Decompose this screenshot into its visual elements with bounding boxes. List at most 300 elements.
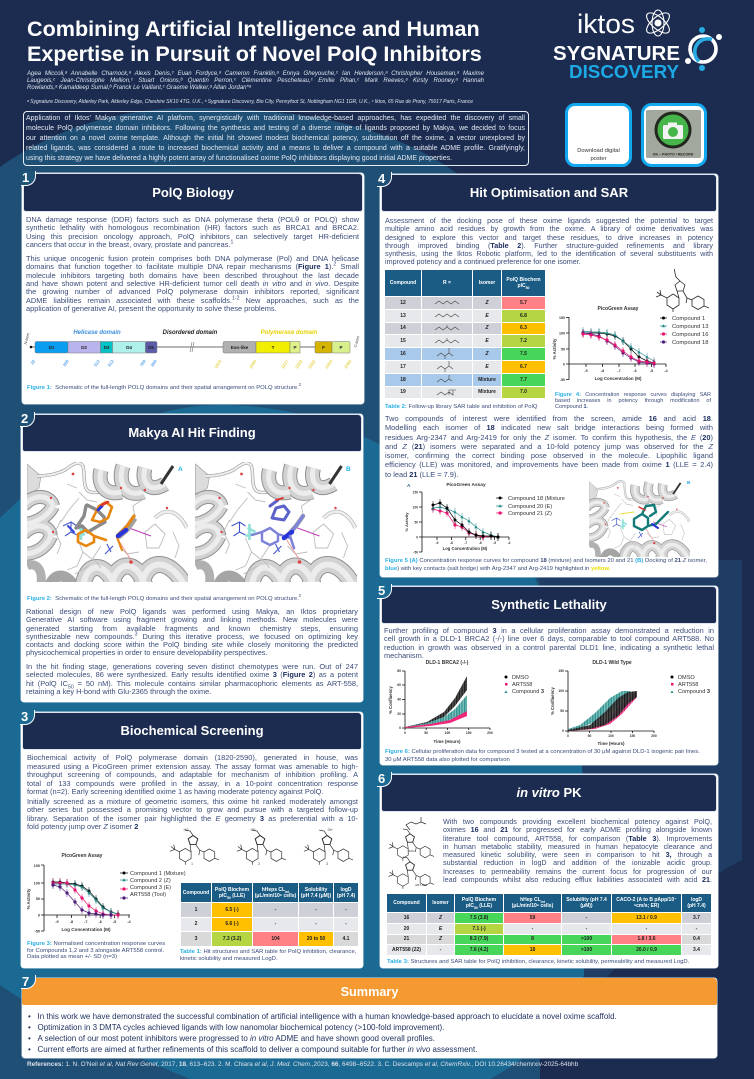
chart: figure 5A PicoGreen assay: 150 [413, 490, 418, 494]
text block: biochemical activity: Biochemical activity of PolQ polymerase domain (1820-2590), generated in house, was [27, 753, 358, 762]
chart: DLD-1 BRCA2 proliferation: 150 [466, 731, 472, 735]
logo: iktos: iktos [577, 9, 635, 39]
legend: ART558 [678, 682, 698, 688]
chemical structures 21 and ART-558: 16/21 [407, 849, 415, 853]
chart: DLD-1 BRCA2 proliferation: DLD-1 BRCA2 (-/-) [426, 660, 469, 666]
text block: compounds of interest: residues Arg-2347 and Arg-2419 for only the Z isomer. To confirm this hypothesis, the E (20) [385, 433, 713, 442]
table 2: follow-up library SAR: Z [485, 351, 489, 357]
bullet list: conclusions: • A selection of our most potent inhibitors were progressed to in vitro ADME and have shown good overall profiles. [28, 1034, 435, 1042]
table 3: PK SAR: 3.4 [693, 947, 700, 953]
chart: DLD-1 BRCA2 proliferation: 60 [397, 683, 401, 687]
chart: figure 5A PicoGreen assay: PicoGreen Assay [446, 482, 486, 488]
band: compound 3 [568, 691, 630, 731]
curve: compound 13 [583, 331, 654, 361]
table 1: hit structures and SAR: 1 [195, 907, 197, 913]
legend: Compound 13 [672, 324, 708, 330]
text block: compounds of interest: Two compounds of interest were identified from the screen, amide 16 and acid 18. [385, 414, 713, 423]
chemical structures 1, 2, 3: OH [328, 828, 333, 832]
figure 1: POLQ domain schematic: Polymerase domain [261, 330, 318, 336]
caption: figure 3: for Compounds 1,2 and 3 alongside ART558 control. [27, 948, 164, 954]
table 2: follow-up library SAR: pIC50 [518, 283, 529, 290]
text block: Makya rational design: synthesizable new compounds.3 During this iterative process, we focused on optimizing key [26, 631, 358, 641]
chart: figure 4 PicoGreen assay with structure: -5 [650, 369, 653, 373]
table 1: hit structures and SAR: (pH 7.4 (μM)) [301, 892, 331, 898]
chart: figure 4 PicoGreen assay with structure: -50 [560, 378, 565, 382]
table 3: PK SAR [387, 894, 711, 955]
caption: figure 4: based increases in potency through modification of [555, 398, 711, 404]
section number 5: 5 [378, 583, 385, 598]
table 1: hit structures and SAR: 6.5 (-) [225, 907, 239, 913]
chart: figure 5A PicoGreen assay: -8 [450, 541, 453, 545]
chart: figure 4 PicoGreen assay with structure: -7 [617, 369, 621, 373]
chart: figure 5A PicoGreen assay: % Activity [404, 512, 409, 531]
section number 2: 2 [21, 411, 28, 426]
figure 1: POLQ domain schematic: Disordered domain [163, 330, 218, 336]
authors: Agea Miccoli,ᵃ Annabelle Charnock,ᵃ Alexis Denis,ᶜ Euan Fordyce,ᵃ Cameron Franklin,ᵃ Ennya Gheyouche,ᶜ Ian Henderson,ᵃ Christopher Houseman,ᵃ Maxime [27, 71, 484, 77]
text block: hit finding results: retaining a key H-bond with Glu-2365 through the oxime. [26, 687, 211, 696]
curve: compound 21 [433, 509, 498, 537]
chart: figure 3 PicoGreen assay: 100 [34, 882, 40, 886]
chart: figure 5A PicoGreen assay: -4 [508, 541, 511, 545]
section heading: Makya AI Hit Finding: Makya AI Hit Finding [128, 425, 256, 440]
table 2: follow-up library SAR: E [485, 338, 489, 344]
chart: DLD-1 Wild Type proliferation: Time (Hours) [598, 741, 625, 746]
figure 1: POLQ domain schematic: 2090 [248, 358, 258, 369]
table 2: follow-up library SAR: 19 [400, 389, 406, 395]
figure 1: POLQ domain schematic: 2590 [343, 358, 353, 369]
section heading: Synthetic Lethality: Synthetic Lethality [491, 597, 607, 612]
table 3: PK SAR: ART558 (22) [392, 947, 421, 953]
table 3: PK SAR: 3.7 [693, 915, 700, 921]
QR code box: photo record: OK – PHOTO / RECORD [653, 152, 694, 156]
table 1: hit structures and SAR: Compound [183, 890, 209, 896]
table 2: follow-up library SAR: 7.7 [520, 377, 527, 383]
panel: in vitro PK [380, 774, 718, 968]
chart: figure 3 PicoGreen assay: -9 [55, 920, 59, 924]
legend: Compound 18 (Mixture [508, 496, 565, 502]
abstract box [23, 111, 529, 166]
table 1: hit structures and SAR: pIC50 (LLE) [219, 892, 245, 900]
chemical structures 21 and ART-558 [388, 817, 434, 889]
text block: hit finding results: selected molecules, 86 were synthesized. Early results identified oxime 3 (Figure 2) as a potent [26, 670, 358, 679]
caption: figure 5 [385, 558, 707, 572]
section heading: Summary: Summary [341, 985, 398, 999]
table 2: follow-up library SAR: 18 [400, 377, 406, 383]
table 2: follow-up library SAR: 16 [400, 351, 406, 357]
text block: ADME profiling: substantial reduction in logD and addition of the ionizable acidic group. [443, 858, 712, 867]
text block: docking pose assessment [385, 216, 713, 266]
R-group sketches for table 2 [434, 300, 460, 396]
chart: figure 5A PicoGreen assay: -7 [464, 541, 467, 545]
section number 4: 4 [378, 171, 385, 186]
title: Expertise in Pursuit of Novel PolQ Inhibitors [27, 41, 482, 66]
logo: Sygnature Discovery: DISCOVERY [569, 62, 679, 82]
table 3: PK SAR: 7.6 (4.2) [470, 947, 488, 953]
chart: DLD-1 BRCA2 proliferation: Time (Hours) [434, 739, 461, 744]
table 1: hit structures and SAR: (pH 7.4) [337, 892, 355, 898]
table 3: PK SAR: pIC50 (LLE) [466, 903, 492, 910]
text block: compounds of interest: to lead 21 (LLE = 7.9). [385, 470, 458, 479]
table 3: PK SAR: Z [439, 936, 442, 942]
text block: PolQ fusion protein: molecule inhibitors targeting both domains have been described throughout the last decade [26, 271, 359, 280]
legend: Compound 21 (Z) [508, 511, 552, 517]
text block: Makya rational design: Rational design of new PolQ ligands was performed using Makya, an Iktos proprietary [26, 607, 358, 616]
chart: figure 4 PicoGreen assay with structure [552, 269, 710, 382]
download digital poster box: Download digital [577, 148, 620, 154]
figure 1: POLQ domain schematic: D3 [104, 345, 110, 350]
chart: DLD-1 Wild Type proliferation: 50 [560, 709, 564, 713]
legend: Compound 16 [672, 332, 708, 338]
table 2: follow-up library SAR: 15 [400, 338, 406, 344]
panel: Makya AI Hit Finding [21, 414, 363, 702]
chart: DLD-1 Wild Type proliferation: 150 [558, 669, 564, 673]
figure 1: POLQ domain schematic: 2424 [324, 358, 334, 369]
text block: PolQ biology introduction: Using this precision oncology approach, PolQ inhibitors can selectively target HR-deficient [26, 232, 359, 241]
text block: PolQ fusion protein: This unique oncogenic fusion protein comprises both DNA polymerase (Pol) and DNA helicase [26, 254, 359, 263]
table 1: hit structures and SAR: - [345, 921, 347, 927]
text block: isomer separation: fold potency jump over Z isomer 2 [27, 822, 138, 831]
figure 1: POLQ domain schematic: 613 [107, 358, 115, 367]
section number 3: 3 [21, 709, 28, 724]
text block: compounds of interest: Modelling each isomer of 18 indicated new salt bridge interactions being formed with [385, 423, 713, 432]
chart: figure 3 PicoGreen assay: Log Concentration (M) [62, 927, 111, 932]
table 3: PK SAR: 7.1 (-) [472, 926, 486, 932]
figure 5B: docking of compound 21 [589, 480, 691, 557]
text block: Makya rational design: Generative AI software using fragment growing and linking methods. New molecules were [26, 615, 358, 624]
text block: compounds of interest: efficiency (LLE) was monitored, and improvements have been made from oxime 1 (LLE = 2.4) [385, 460, 713, 469]
chart: figure 3 PicoGreen assay: 0 [38, 914, 40, 918]
chart: figure 4 PicoGreen assay with structure: -6 [633, 369, 637, 373]
table 2: follow-up library SAR: 17 [400, 364, 406, 370]
table 3: PK SAR: Compound [393, 900, 420, 906]
caption: figure 2: Figure 2: Schematic of the full-length POLQ domains and their spatial arrangement on POLQ structure.2 [27, 593, 301, 602]
section heading: Hit Optimisation and SAR [381, 174, 717, 212]
section number 4 [377, 172, 392, 187]
caption: table 2: Table 2: Follow-up library SAR table and inhibition of PolQ [385, 404, 537, 410]
chart: DLD-1 BRCA2 proliferation: 50 [424, 731, 428, 735]
table 1: hit structures and SAR: - [315, 907, 317, 913]
table 3: PK SAR: - [586, 915, 587, 921]
figure 1: POLQ domain schematic: 2253 [294, 358, 304, 369]
table 1: hit structures and SAR: 20 to 50 [307, 936, 325, 942]
figure 1: POLQ domain schematic: 32 [29, 358, 37, 365]
panel: Summary [22, 978, 717, 1058]
caption: figure 4 [555, 392, 712, 410]
text block: ADME profiling [443, 817, 712, 884]
text block: biochemical activity [27, 753, 358, 796]
chemical structures 1, 2, 3 [170, 828, 353, 866]
text block: ADME profiling: in human metabolic stability, measured in human hepatocyte clearance and [443, 842, 712, 851]
table 2: follow-up library SAR: 14 [400, 325, 406, 331]
caption: figure 5: Figure 5 (A) Concentration response curves for compound 18 (mixture) and Isomers 20 and 21 (B) Docking of 21 Z isomer, [385, 558, 707, 564]
section heading: Makya AI Hit Finding [22, 414, 362, 452]
chart: figure 5A PicoGreen assay: -6 [479, 541, 482, 545]
chart: figure 3 PicoGreen assay: -50 [34, 930, 40, 934]
table 2: follow-up library SAR [385, 270, 545, 398]
section heading: in vitro PK: in vitro PK [516, 785, 582, 800]
text block: compounds of interest: and Z (21) isomers were separated and a 10-fold potency jump was observed for the Z [385, 442, 713, 451]
table 2: follow-up library SAR: 6.7 [520, 364, 527, 370]
legend: DMSO [512, 675, 529, 681]
table 3: PK SAR: ⁶cm/s; ER) [634, 903, 659, 909]
chemical structures 1, 2, 3: HO [251, 828, 256, 832]
chart: figure 4 PicoGreen assay with structure: -9 [584, 369, 588, 373]
figure 1: POLQ domain schematic: 513 [93, 358, 101, 367]
figure 1: POLQ domain schematic: 2332 [307, 358, 317, 369]
chart: DLD-1 BRCA2 proliferation: 80 [397, 669, 401, 673]
text block: docking pose assessment: synthesis, using the Iktos Robotic platform, led to the identification of several substituents with [385, 249, 713, 258]
legend: Compound 1 (Mixture) [130, 871, 186, 877]
table 1: hit structures and SAR: 3 [195, 936, 197, 942]
caption: table 1: Table 1: Hit structures and SAR table for PolQ inhibition, clearance, [180, 949, 356, 955]
chart: DLD-1 Wild Type proliferation: DLD-1 Wild Type [592, 660, 632, 666]
text block: biochemical activity: total of 133 compounds were profiled in the assay, in a 10-point concentration response [27, 778, 358, 788]
QR code box: photo record [641, 103, 707, 167]
table 1: hit structures and SAR: logD [340, 886, 352, 892]
chart: figure 3 PicoGreen assay: -5 [113, 920, 116, 924]
table 3: PK SAR: hHep CLint [520, 897, 545, 904]
table 2: follow-up library SAR: Z [485, 300, 489, 306]
chart: figure 4 PicoGreen assay with structure: PicoGreen Assay [598, 306, 639, 312]
chart: DLD-1 Wild Type proliferation: 200 [651, 734, 657, 738]
chart: DLD-1 BRCA2 proliferation [388, 660, 544, 744]
download digital poster box: poster [590, 156, 607, 162]
table 3: PK SAR: (μL/min/10⁶ cells) [512, 903, 553, 909]
chart: figure 4 PicoGreen assay with structure: 50 [561, 348, 565, 352]
abstract box: using this strategy we have delivered a highly potent array of functionalised oxime PolQ inhibitors displaying good initial ADME properties. [26, 154, 452, 162]
figure 5B: docking of compound 21: B [687, 480, 691, 485]
section heading: Biochemical Screening [22, 712, 362, 750]
caption: figure 3: Figure 3: Normalised concentration response curves [27, 941, 165, 947]
section heading: Biochemical Screening: Biochemical Screening [120, 723, 264, 738]
chart: DLD-1 BRCA2 proliferation: 100 [445, 731, 450, 735]
table 1: hit structures and SAR: 104 [271, 936, 280, 942]
text block: cellular profiling: mechanism. [384, 651, 424, 660]
title: Combining Artificial Intelligence and Human [27, 16, 480, 41]
panel: Synthetic Lethality [380, 586, 718, 765]
chart: figure 3 PicoGreen assay: 50 [36, 897, 40, 901]
chart: figure 4 PicoGreen assay with structure: 100 [559, 332, 565, 336]
logo: Sygnature Discovery [553, 27, 722, 82]
table 3: PK SAR: E [439, 926, 442, 932]
curve: compound 18 [583, 333, 654, 364]
chart: figure 5A PicoGreen assay: 50 [414, 520, 418, 524]
chart: figure 5A PicoGreen assay [404, 482, 565, 554]
chart: DLD-1 BRCA2 proliferation: 40 [397, 698, 401, 702]
table 2: follow-up library SAR: Compound [390, 280, 416, 286]
chemical structure [656, 267, 709, 312]
table 3: PK SAR: - [586, 926, 587, 932]
caption: figure 6: 30 μM ART558 data also plotted for comparison [385, 757, 510, 763]
chart: DLD-1 Wild Type proliferation: 100 [558, 689, 564, 693]
text block: PolQ fusion protein: and have shown potent and selective HR-deficient tumor cell death in vitro and in vivo. Despite [26, 279, 359, 288]
text block: ADME profiling: With two compounds providing excellent biochemical potency against PolQ, [443, 817, 712, 826]
legend: Compound 2 (Z) [130, 878, 171, 884]
ligand A: orange [68, 502, 135, 550]
table 3: PK SAR: 21 [404, 936, 409, 942]
band: DMSO [568, 691, 637, 731]
figure 2: docking poses A and B [27, 462, 357, 582]
text block: hit finding results: In the hit finding stage, generations covering seven distinct chemotypes were run. Out of 247 [26, 662, 358, 671]
table 2: follow-up library SAR: Mixture [478, 389, 496, 395]
chart: DLD-1 Wild Type proliferation: 0 [567, 734, 569, 738]
chart: DLD-1 BRCA2 proliferation: 200 [487, 731, 493, 735]
section number 6 [377, 772, 392, 787]
table 1: hit structures and SAR: - [275, 907, 276, 913]
text block: docking pose assessment: designed to explore this vector and target these residues, to drive increases in potency [385, 233, 713, 242]
abstract box: our attention on a novel oxime template. Although the initial hit showed modest biochemical potency, substitution off the oxime, a vector unexplored by [26, 134, 525, 142]
band: ART558 [568, 692, 637, 731]
table 3: PK SAR: CACO-2 (A to B pApp/10⁻ [616, 897, 677, 903]
curve: compound 1 [583, 333, 654, 363]
text block: isomer separation: other series but possessed a promising vector to grow and pursue with a targeted follow-up [27, 805, 358, 814]
table 2: follow-up library SAR: Isomer [479, 280, 495, 286]
legend: Compound 3 (E) [130, 885, 171, 891]
section heading: Summary [22, 978, 717, 1005]
text block: hit finding results [26, 662, 358, 696]
chart: figure 4 PicoGreen assay with structure: 150 [559, 316, 565, 320]
section number 5 [377, 584, 392, 599]
authors: Rowlands,ᵃ Kamaldeep Sumal,ᵇ Franck Le Vaillant,ᶜ Graeme Walker,ᵃ Allan Jordan*ᵃ [27, 85, 251, 91]
curve: compound 1 [53, 882, 118, 914]
figure 1: POLQ domain schematic: C-term [354, 336, 360, 348]
bullet list: conclusions: • Optimization in 3 DMTA cycles achieved ligands with low nanomolar biochemical potency (>100-fold improvement). [28, 1022, 444, 1032]
table 1: hit structures and SAR [181, 883, 358, 946]
table 3: PK SAR: 20 [404, 926, 409, 932]
caption: table 1 [180, 949, 356, 962]
section number 7 [21, 975, 36, 989]
authors [26, 70, 484, 91]
chart: figure 3 PicoGreen assay [27, 853, 186, 934]
legend: Compound 3 [512, 689, 544, 695]
text block: PolQ biology introduction: DNA damage response (DDR) factors such as DNA polymerase theta (POLθ or POLQ) show [26, 215, 359, 224]
text block: Makya rational design: physicochemical properties in order to ensure developability perspectives. [26, 648, 268, 657]
table 2: follow-up library SAR: 7.5 [520, 351, 527, 357]
title [27, 16, 482, 66]
legend [670, 675, 710, 695]
logo: iktos [577, 9, 673, 39]
table 3: PK SAR: 13.1 / 0.9 [636, 915, 657, 921]
table 2: follow-up library SAR: Z [485, 325, 489, 331]
table 1: hit structures and SAR: (μL/min/10⁶ cells) [255, 892, 296, 898]
table 3: PK SAR: >100 [581, 947, 592, 953]
text block: docking pose assessment: improved potency and a continued preference for one isomer. [385, 257, 581, 266]
chart: DLD-1 Wild Type proliferation: 150 [630, 734, 635, 738]
chart: figure 3 PicoGreen assay: -4 [127, 920, 132, 924]
section heading: PolQ Biology [23, 173, 363, 212]
affiliations: ᵃ Sygnature Discovery, Alderley Park, Alderley Edge, Cheshire SK10 4TG, U.K., ᵇ Sygnature Discovery, Bio City, Pennyfoot St, Nottingham NG1 1GR, U.K., ᶜ Iktos, 65 Rue de Prony, 75017 Paris, France [27, 99, 473, 105]
text block: docking pose assessment: through improved binding (Table 2). Further structure-guided refinements and library [385, 241, 713, 250]
section number 2 [20, 412, 35, 427]
text block: hit finding results: hit (PolQ IC50 = 50 nM). This molecule contains similar pharmacophoric elements as ART-558, [26, 679, 358, 690]
chemical structures 1, 2, 3: 1 [191, 862, 193, 866]
curve: compound 2 [53, 884, 118, 914]
chart: figure 3 PicoGreen assay: -7 [84, 920, 87, 924]
chart: figure 3 PicoGreen assay: -8 [70, 920, 73, 924]
table 3: PK SAR: Solubility (pH 7.4 [566, 897, 607, 903]
text block: PolQ fusion protein: application of generative AI, present the opportunity to solve these problems. [26, 304, 277, 313]
legend [504, 675, 544, 695]
table 2: follow-up library SAR: Mixture [478, 377, 496, 383]
legend: Compound 20 (E) [508, 504, 552, 510]
chart: DLD-1 BRCA2 proliferation: 0 [404, 731, 406, 735]
band: ART558 [405, 711, 467, 728]
chart: figure 5A PicoGreen assay: -5 [493, 541, 496, 545]
text block: isomer separation: library. Separation of the isomer pair highlighted the E geometry 3 as preferential with a 10- [27, 814, 358, 823]
table 3: PK SAR: 7.5 (3.8) [470, 915, 488, 921]
panel: Biochemical Screening [21, 712, 363, 968]
panel: PolQ Biology [22, 173, 364, 404]
figure 1: POLQ domain schematic: D5 [148, 345, 154, 350]
table 3: PK SAR: - [696, 926, 697, 932]
table 1: hit structures and SAR: - [275, 921, 276, 927]
text block: docking pose assessment: multiple amino acid residues by growth from the oxime. A library of oxime derivatives was [385, 224, 713, 233]
chart: figure 5A PicoGreen assay: 0 [416, 536, 418, 540]
text block: biochemical activity: format (n=2). Early screening identified oxime 1 as having moderate potency against PolQ. [27, 787, 323, 796]
curve: compound 18 [433, 503, 498, 537]
text block: isomer separation: Initially screened as a mixture of geometric isomers, this oxime hit ranked moderately amongst [27, 797, 358, 806]
text block: PolQ fusion protein: the growing number of advanced PolQ polymerase domain inhibitors reported, significant [26, 287, 359, 296]
logos [553, 9, 722, 82]
caption: figure 3: Data plotted as mean +/- SD (n=3) [27, 954, 117, 960]
table 2: follow-up library SAR: 13 [400, 313, 406, 319]
table 3: PK SAR: Isomer [432, 900, 449, 906]
band: DMSO [405, 676, 467, 728]
bullet list: conclusions: • Current efforts are aimed at further refinements of this scaffold to deliver a compound suitable for further in vivo assessment. [28, 1044, 477, 1054]
chart: DLD-1 BRCA2 proliferation: % Confluency [388, 685, 393, 714]
chart: figure 5A PicoGreen assay: -50 [413, 550, 418, 554]
curve: compound 3 [53, 883, 118, 915]
section number 3 [20, 710, 35, 725]
table 3: PK SAR: 16 [404, 915, 409, 921]
text block: PolQ biology introduction [26, 215, 359, 249]
figure 1: POLQ domain schematic: Helicase domain [73, 330, 121, 336]
text block: ADME profiling: Increases to permeability remains the current focus for progression of our [443, 867, 712, 876]
text block: cellular profiling [384, 626, 714, 660]
chart: DLD-1 Wild Type proliferation: 0 [562, 729, 564, 733]
chart: DLD-1 BRCA2 proliferation: 0 [399, 726, 401, 730]
table 2: follow-up library SAR: 12 [400, 300, 406, 306]
table 3: PK SAR: 59 [530, 915, 535, 921]
caption: table 1: kinetic solubility and measured LogD. [180, 956, 278, 962]
caption: figure 3 [27, 941, 165, 960]
figure 2: docking poses A and B: A [178, 466, 183, 473]
table 2: follow-up library SAR: 7.2 [520, 338, 527, 344]
chart: figure 5A PicoGreen assay: A [407, 483, 411, 488]
curve: ART558 [53, 885, 111, 915]
text block: isomer separation [27, 797, 358, 831]
caption: figure 4: Compound 1. [555, 404, 588, 410]
figure 1: POLQ domain schematic: 289 [62, 358, 70, 367]
caption: figure 1: Figure 1: Schematic of the full-length POLQ domains and their spatial arrangement on POLQ structure.2 [27, 382, 301, 391]
text block: biochemical activity: throughput screening of compounds, and adaptable for mechanism of inhibition profiling. A [27, 770, 358, 779]
table 1: hit structures and SAR: PolQ Biochem [215, 886, 249, 892]
legend: Compound 18 [672, 340, 708, 346]
table 3: PK SAR: 26.0 / 0.9 [636, 947, 657, 953]
table 2: follow-up library SAR: 6.8 [520, 313, 527, 319]
figure 2: docking poses A and B: B [346, 466, 351, 473]
table 3: PK SAR: - [440, 947, 441, 953]
table 1: hit structures and SAR: - [315, 921, 317, 927]
table 2: follow-up library SAR: 6.3 [520, 325, 527, 331]
band: compound 3 [405, 695, 467, 728]
table 3: PK SAR: 18 [530, 947, 535, 953]
chemical structures 1, 2, 3: 2 [258, 862, 260, 866]
table 3: PK SAR: PolQ Biochem [462, 897, 496, 903]
table 3: PK SAR: 1.8 / 3.6 [637, 936, 656, 942]
text block: ADME profiling: oximes 16 and 21 for progressed for early ADME profiling alongside known [443, 825, 712, 834]
bullet list: conclusions [28, 1012, 617, 1054]
